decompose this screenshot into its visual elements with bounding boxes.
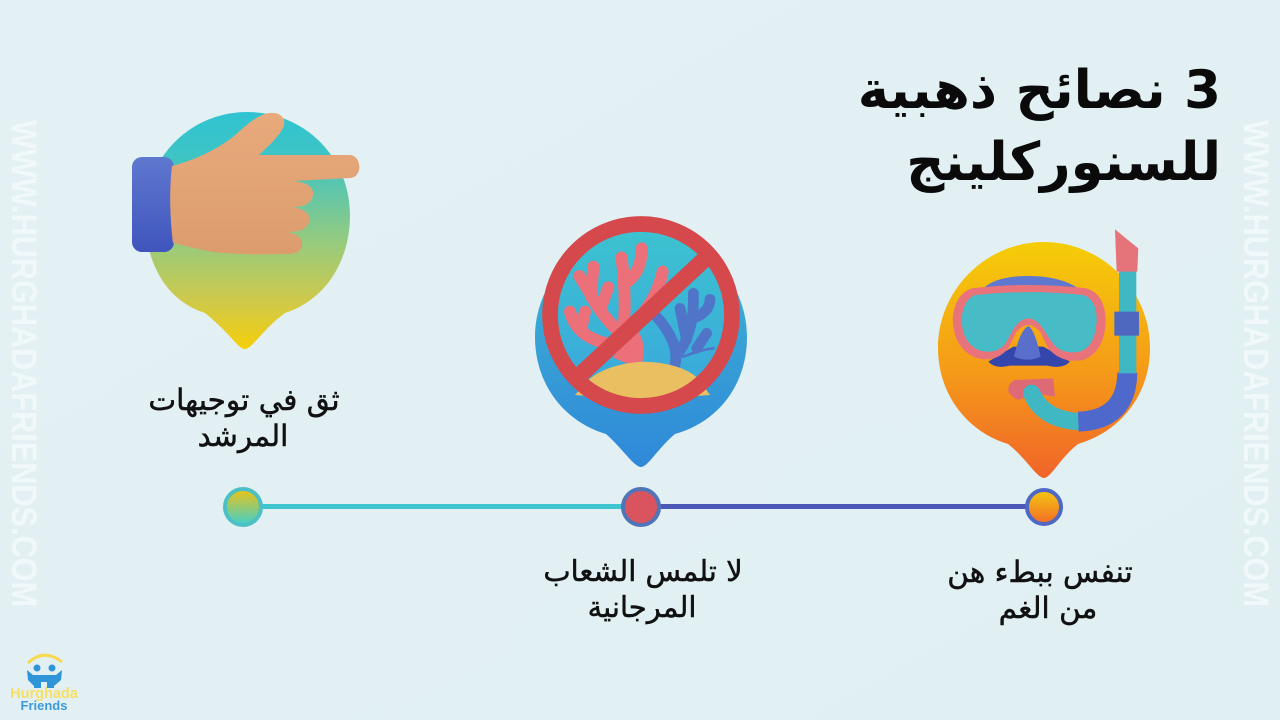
mask frame <box>953 285 1106 361</box>
label: do not touch reefs: لا تلمس الشعاب <box>543 554 743 588</box>
dot 3 <box>1027 490 1061 524</box>
logo arc <box>28 655 62 663</box>
nose shadow <box>988 347 1070 367</box>
lens <box>962 292 1097 352</box>
watermark right text: WWW.HURGHADAFRIENDS.COM <box>1236 120 1275 607</box>
logo heads <box>34 664 40 672</box>
pin shape <box>145 112 350 349</box>
dot 1 <box>225 489 261 525</box>
tube tip <box>1115 229 1138 272</box>
label: trust guide <box>148 383 340 453</box>
icon: coral prohibition <box>550 224 732 406</box>
dot 2 <box>623 489 659 525</box>
label: trust guide: ثق في توجيهات <box>148 383 340 418</box>
icon: cuff <box>132 157 174 252</box>
pin: no touching coral <box>535 224 747 467</box>
tube lower teal <box>1032 393 1080 422</box>
logo figure <box>27 670 62 688</box>
logo <box>10 655 79 713</box>
pin shape <box>535 231 747 467</box>
label: trust guide: المرشد <box>198 419 288 453</box>
title: 3 نصائح ذهبية <box>858 60 1221 121</box>
label: do not touch reefs <box>543 554 743 624</box>
logo name: Hurghada <box>10 686 79 702</box>
nose <box>1014 326 1041 360</box>
sea <box>554 228 728 402</box>
label: breathe slowly: من الغم <box>999 591 1097 626</box>
strap <box>983 276 1078 288</box>
blue coral <box>657 293 713 365</box>
tube lower blue <box>1078 373 1127 422</box>
watermark left text: WWW.HURGHADAFRIENDS.COM <box>4 120 43 607</box>
tube upper <box>1119 270 1136 373</box>
line blue <box>650 504 1035 509</box>
icon: hand <box>170 113 359 254</box>
title: للسنوركلينج <box>906 132 1221 193</box>
prohibition ring <box>550 224 732 406</box>
pin shape <box>938 242 1150 478</box>
line teal <box>255 504 631 509</box>
logo friends: Friends <box>21 698 67 713</box>
mouthpiece <box>1008 378 1055 400</box>
sand <box>575 362 710 400</box>
prohibition slash <box>578 257 707 377</box>
icon: mask and snorkel <box>953 229 1139 422</box>
pin: snorkel mask <box>938 229 1150 478</box>
timeline <box>225 489 1061 525</box>
title <box>858 60 1221 193</box>
label: do not touch reefs: المرجانية <box>588 590 696 624</box>
pink coral <box>570 248 663 363</box>
clip <box>1114 312 1139 336</box>
pin: hand pointing <box>132 112 359 349</box>
label: breathe slowly: تنفس ببطء هن <box>947 555 1133 589</box>
label: breathe slowly <box>947 555 1133 626</box>
